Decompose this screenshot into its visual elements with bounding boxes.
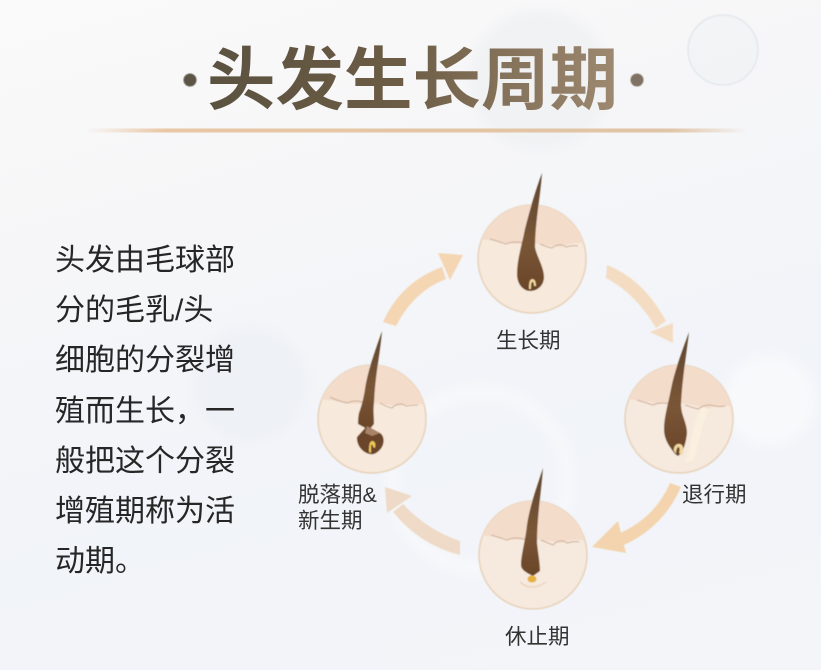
arrow: telogen to shedding [385, 487, 460, 555]
description text: 动期。 [55, 545, 145, 578]
label: growth phase: 生长期 [496, 329, 561, 353]
description text: 分的毛乳/头 [55, 294, 213, 327]
arrow: catagen to telogen [592, 483, 681, 553]
hair diagram: growth phase [478, 173, 586, 313]
description text: 殖而生长，一 [55, 395, 235, 428]
hair diagram: shedding and new growth phase [318, 331, 426, 473]
hair diagram: telogen phase [479, 468, 587, 609]
label: shedding and new growth phase: 新生期 [298, 509, 363, 533]
description text: 般把这个分裂 [55, 445, 235, 478]
label: shedding and new growth phase [298, 483, 377, 533]
description text: 增殖期称为活 [55, 495, 235, 528]
arrow: new growth to growth phase [383, 253, 463, 326]
title: 头发生长周期 [207, 42, 618, 119]
title underline [85, 128, 747, 132]
arrow: growth to catagen [606, 265, 673, 343]
label: telogen phase: 休止期 [505, 625, 570, 649]
title dot right [630, 74, 644, 86]
description text: 头发由毛球部 [55, 244, 235, 277]
hair diagram: catagen phase [625, 332, 733, 473]
title dot left [184, 74, 196, 86]
label: shedding and new growth phase: 脱落期& [298, 483, 377, 507]
description text: 细胞的分裂增 [55, 344, 235, 377]
description text [55, 244, 235, 578]
label: catagen phase: 退行期 [682, 483, 747, 507]
